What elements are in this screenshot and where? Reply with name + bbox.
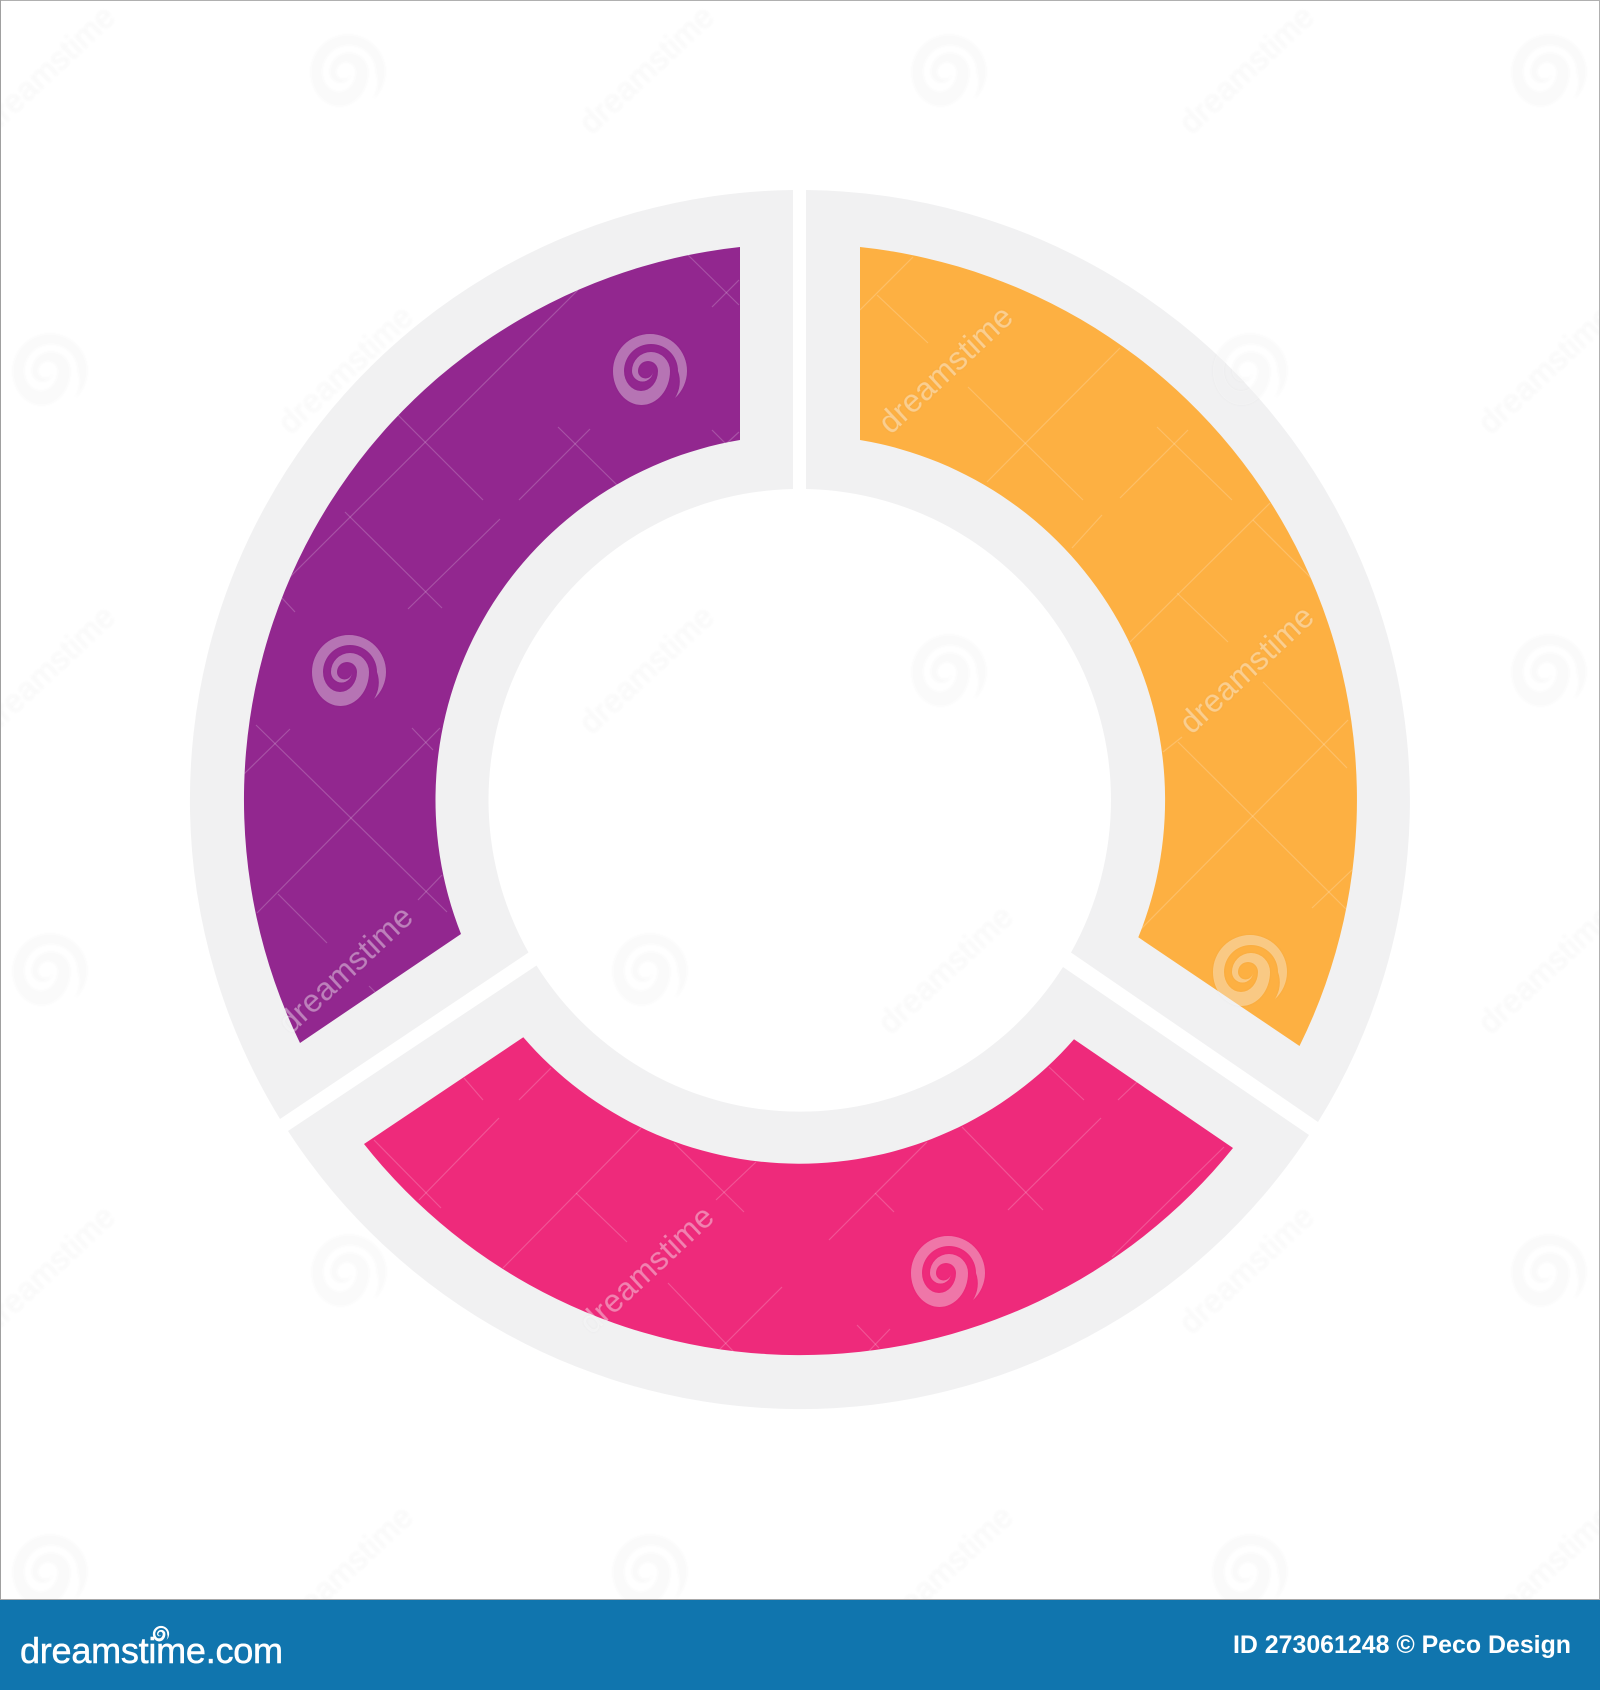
segment: orange [860,247,1357,1046]
watermark lattice lines [244,255,1352,1352]
footer logo wordmark: dreamstime.com [20,1630,283,1671]
footer credit: ID 273061248 © Peco Design [1233,1631,1571,1659]
footer bar [0,1599,1600,1690]
watermark wordmarks: dreamstime [1172,1198,1321,1340]
watermark wordmarks: dreamstime [572,0,721,140]
watermark wordmarks: dreamstime [271,1498,420,1640]
watermark wordmarks: dreamstime [271,298,420,440]
grey backing: right segment [806,190,1410,1122]
grey backing: bottom segment [288,966,1309,1409]
watermark wordmarks: dreamstime [871,1498,1020,1640]
donut chart [190,190,1410,1409]
watermark wordmarks: dreamstime [572,1198,721,1340]
watermark wordmarks: dreamstime [271,898,420,1040]
watermark wordmarks: dreamstime [1172,598,1321,740]
footer logo spiral [153,1626,169,1641]
watermark wordmarks: dreamstime [871,298,1020,440]
watermark wordmarks: dreamstime [871,898,1020,1040]
watermark wordmarks: dreamstime [1172,0,1321,140]
watermark wordmarks: dreamstime [572,598,721,740]
segment: purple [244,247,740,1043]
segment: pink [364,1037,1233,1355]
grey backing: left segment [190,190,793,1119]
